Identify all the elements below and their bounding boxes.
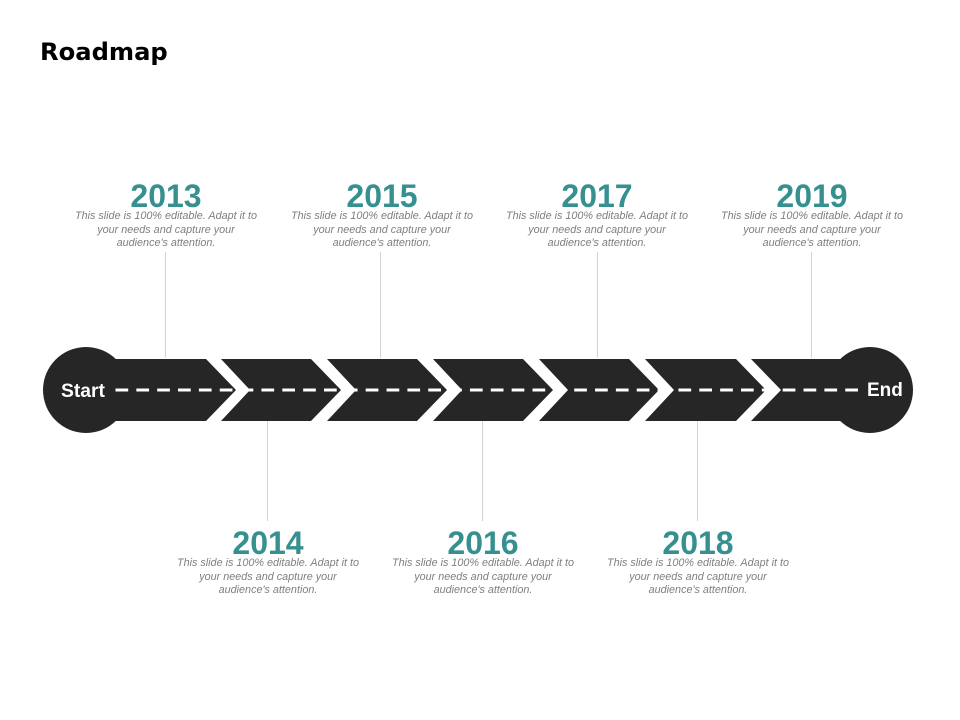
milestone 2016: This slide is 100% editable. Adapt it to: [392, 557, 574, 569]
milestone 2014: your needs and capture your: [199, 570, 337, 582]
title: Roadmap: [40, 38, 168, 66]
milestone 2019: audience's attention.: [763, 237, 861, 249]
milestone 2017: audience's attention.: [548, 237, 646, 249]
milestone 2015: audience's attention.: [333, 237, 431, 249]
chevron band: [86, 359, 870, 421]
milestone 2015: [291, 178, 473, 249]
connector lines: [166, 252, 812, 521]
start label: Start: [61, 381, 106, 402]
milestone 2013: your needs and capture your: [97, 224, 235, 236]
milestone 2014: 2014: [232, 525, 304, 561]
milestone 2014: This slide is 100% editable. Adapt it to: [177, 557, 359, 569]
milestone 2018: This slide is 100% editable. Adapt it to: [607, 557, 789, 569]
milestone 2017: [506, 178, 688, 249]
end circle: [827, 347, 913, 433]
end label: End: [867, 380, 903, 401]
milestone 2013: [75, 178, 257, 249]
milestone 2014: [177, 525, 359, 596]
milestone 2014: audience's attention.: [219, 584, 317, 596]
start circle: [43, 347, 129, 433]
dashed centre line: [116, 388, 858, 392]
milestone 2015: This slide is 100% editable. Adapt it to: [291, 210, 473, 222]
milestone 2018: 2018: [662, 525, 734, 561]
milestone 2016: 2016: [447, 525, 519, 561]
milestone 2016: your needs and capture your: [414, 570, 552, 582]
milestone 2017: 2017: [561, 178, 633, 214]
milestone 2018: [607, 525, 789, 596]
milestone 2015: your needs and capture your: [313, 224, 451, 236]
milestone 2016: audience's attention.: [434, 584, 532, 596]
milestone 2017: your needs and capture your: [528, 224, 666, 236]
milestone 2019: [721, 178, 903, 249]
milestone 2013: audience's attention.: [117, 237, 215, 249]
milestone 2016: [392, 525, 574, 596]
milestone 2017: This slide is 100% editable. Adapt it to: [506, 210, 688, 222]
milestone 2013: This slide is 100% editable. Adapt it to: [75, 210, 257, 222]
milestone 2015: 2015: [346, 178, 418, 214]
milestone 2013: 2013: [130, 178, 202, 214]
milestone 2019: 2019: [776, 178, 848, 214]
milestone 2019: your needs and capture your: [743, 224, 881, 236]
milestone 2019: This slide is 100% editable. Adapt it to: [721, 210, 903, 222]
milestone 2018: your needs and capture your: [629, 570, 767, 582]
milestone 2018: audience's attention.: [649, 584, 747, 596]
